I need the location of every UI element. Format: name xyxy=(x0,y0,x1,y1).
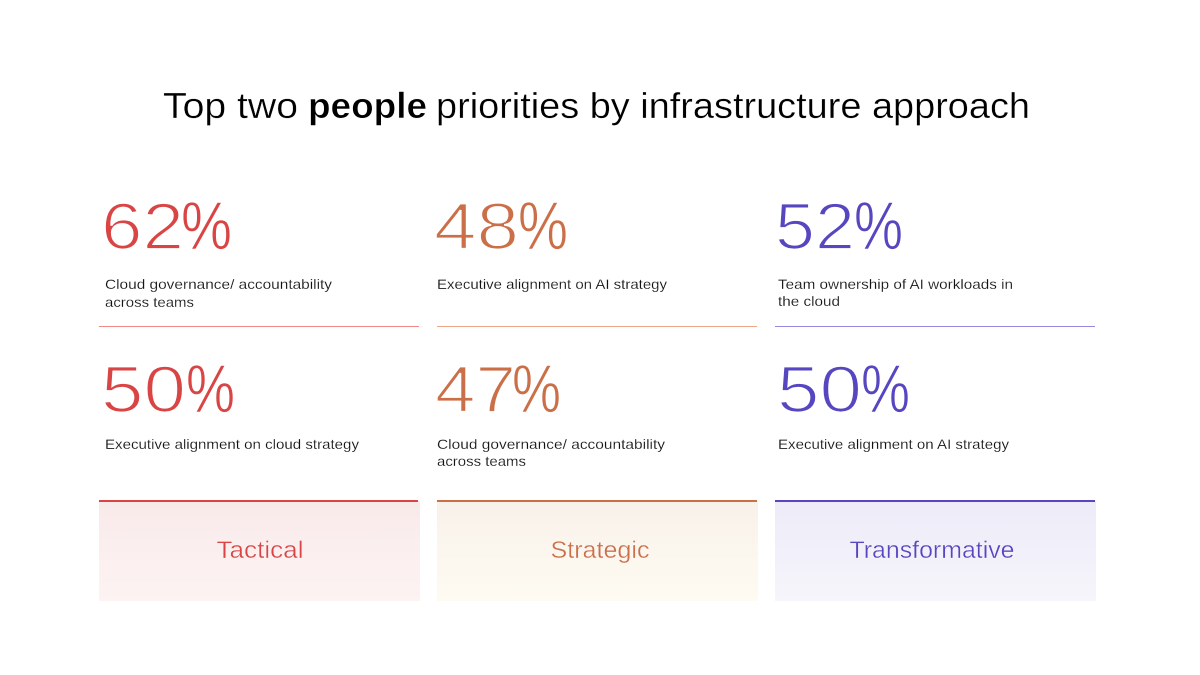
category box: Transformative: Transformative xyxy=(850,537,1014,564)
stat: tactical 62% xyxy=(101,188,332,310)
category box: Tactical xyxy=(99,500,420,601)
title: Top two xyxy=(163,85,298,126)
stat: transformative 52%: Team ownership of AI workloads in xyxy=(778,276,1013,292)
panel: strategic column xyxy=(434,188,758,601)
stat: strategic 48%: % xyxy=(518,188,568,264)
stat: transformative 52%: the cloud xyxy=(778,293,840,309)
stat: transformative 52% xyxy=(775,188,1013,309)
category box: Tactical: Tactical xyxy=(216,537,304,564)
stat: strategic 48%: 48 xyxy=(434,189,519,263)
panel: transformative column xyxy=(775,188,1096,601)
stat: strategic 48%: Executive alignment on AI strategy xyxy=(437,276,667,292)
stat: strategic 48% xyxy=(434,188,667,292)
stat: tactical 62%: Cloud governance/ accountability xyxy=(105,276,332,292)
stat: strategic 47%: 47 xyxy=(435,352,516,426)
stat: strategic 47%: Cloud governance/ accountability xyxy=(437,436,665,452)
stat: transformative 50%: 50 xyxy=(777,352,862,426)
stat: tactical 62%: % xyxy=(181,188,232,264)
category box: Strategic: Strategic xyxy=(550,537,650,564)
stat: tactical 50%: 50 xyxy=(101,352,186,426)
stat: strategic 47% xyxy=(435,351,665,469)
stat: tactical 62%: 62 xyxy=(101,189,184,263)
stat: tactical 50%: % xyxy=(186,351,235,427)
title: people xyxy=(308,85,427,126)
stat: transformative 52%: % xyxy=(854,188,903,264)
stat: transformative 50% xyxy=(777,351,1009,452)
category box: Strategic xyxy=(437,500,758,601)
title: priorities by infrastructure approach xyxy=(436,85,1030,126)
panel: tactical column xyxy=(99,188,420,601)
stat: tactical 50%: Executive alignment on cloud strategy xyxy=(105,436,359,452)
stat: tactical 62%: across teams xyxy=(105,294,194,310)
title xyxy=(163,85,1030,126)
stat: strategic 47%: across teams xyxy=(437,453,526,469)
stat: transformative 50%: Executive alignment on AI strategy xyxy=(778,436,1009,452)
stat: tactical 50% xyxy=(101,351,359,452)
stat: transformative 52%: 52 xyxy=(775,189,855,263)
stat: strategic 47%: % xyxy=(512,351,561,427)
stat: transformative 50%: % xyxy=(861,351,910,427)
category box: Transformative xyxy=(775,500,1096,601)
